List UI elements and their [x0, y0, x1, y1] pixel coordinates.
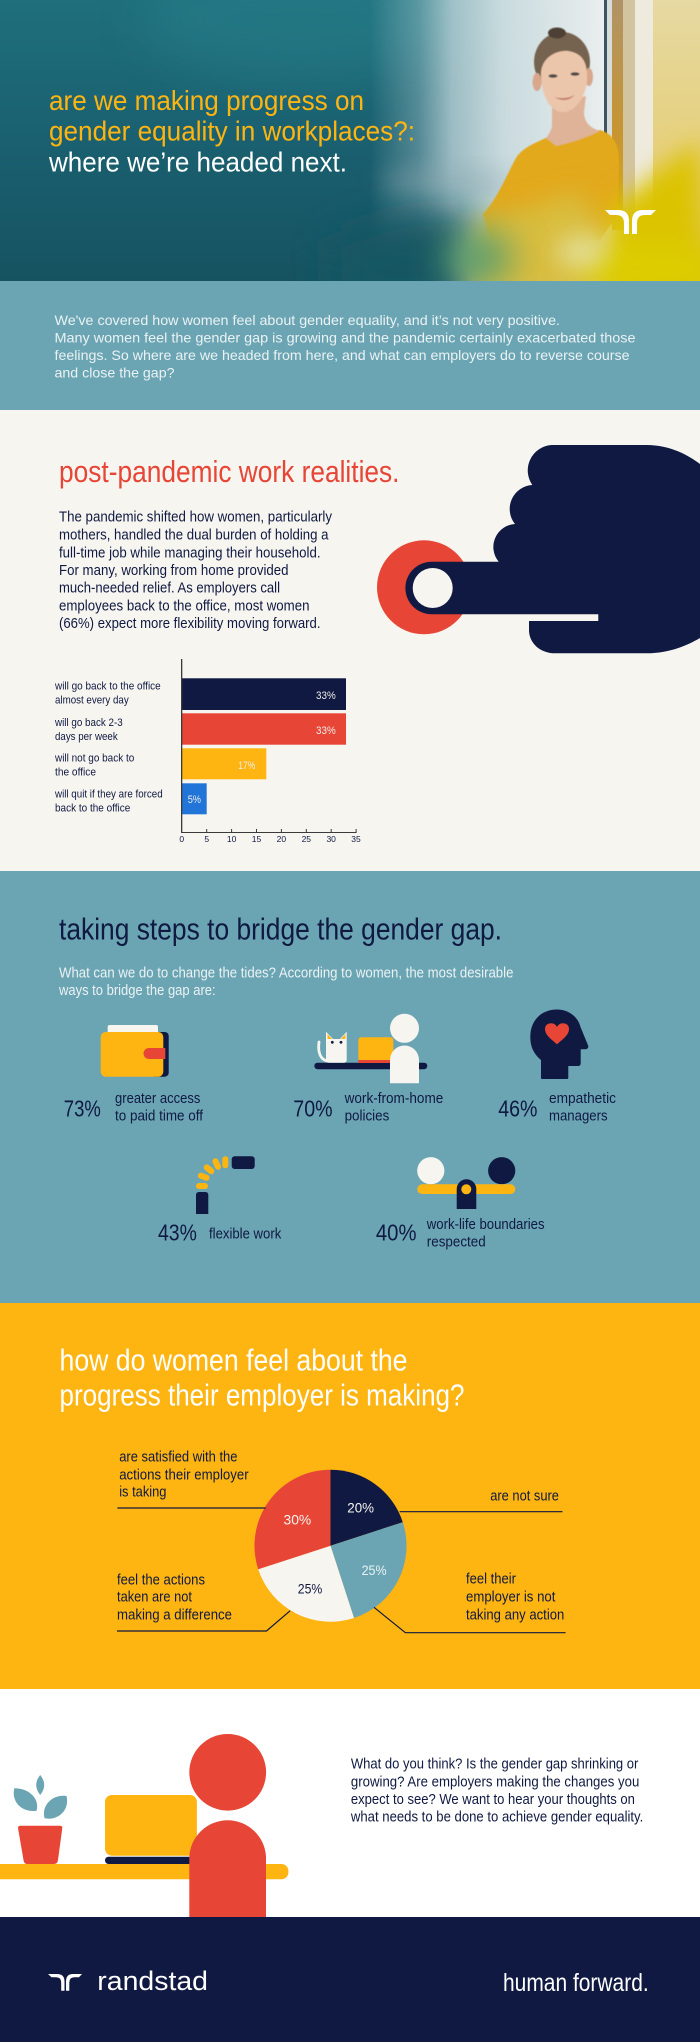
callout: satisfied: actions their employer [119, 1467, 249, 1483]
bar chart: 5% [188, 794, 201, 806]
icon: balance seesaw [417, 1157, 515, 1209]
callout: no difference: making a difference [117, 1607, 232, 1623]
bar chart: 33% [316, 725, 336, 737]
intro text: and close the gap? [54, 366, 175, 380]
panel: post-pandemic work realities [0, 410, 700, 871]
bar chart: will go back to the office [54, 680, 161, 692]
body text: much-needed relief. As employers call [59, 581, 280, 597]
pie chart: 30% [284, 1513, 311, 1528]
icon: wallet [101, 1025, 169, 1077]
stat: 43% flexible work [158, 1220, 282, 1246]
bar chart: 30 [326, 834, 336, 844]
intro text: We've covered how women feel about gender equality, and it’s not very positive. [54, 313, 560, 328]
callout: no difference: taken are not [117, 1590, 192, 1606]
bar chart: days per week [55, 731, 118, 743]
window frame [604, 0, 700, 281]
subheading: ways to bridge the gap are: [58, 983, 216, 999]
stat: 43% flexible work: 43% [158, 1220, 197, 1246]
stat: 40% work-life boundaries: work-life boundaries [426, 1217, 545, 1233]
hero title: gender equality in workplaces?: [49, 116, 415, 147]
body text: For many, working from home provided [59, 563, 288, 579]
body text: (66%) expect more flexibility moving forward. [59, 616, 320, 632]
closing text [350, 1756, 643, 1826]
heading: taking steps to bridge the gender gap. [59, 911, 502, 946]
stat: 40% work-life boundaries [376, 1217, 545, 1251]
callout: no action: employer is not [466, 1589, 555, 1605]
stat: 43% flexible work: flexible work [209, 1227, 282, 1243]
stat: 70% work-from-home: work-from-home [344, 1091, 443, 1107]
bar chart: 33% [316, 690, 336, 702]
stat: 70% work-from-home: 70% [293, 1096, 333, 1122]
bar chart: the office [55, 767, 96, 779]
stat: 40% work-life boundaries: respected [427, 1235, 486, 1251]
bar chart: will go back 2-3 [54, 717, 123, 729]
icon: cat, laptop and person [314, 1014, 427, 1083]
stat: 70% work-from-home: policies [345, 1109, 389, 1125]
subheading [58, 965, 513, 999]
heading: progress their employer is making? [60, 1378, 464, 1413]
pie chart: 25% [298, 1581, 322, 1596]
callout: no action: taking any action [466, 1607, 564, 1623]
closing text: what needs to be done to achieve gender equality. [350, 1810, 643, 1826]
intro text: feelings. So where are we headed from here, and what can employers do to reverse course [54, 348, 630, 363]
stat: 46% empathetic managers: managers [549, 1109, 608, 1125]
body text: employees back to the office, most women [59, 599, 310, 615]
body text: full-time job while managing their household. [59, 545, 320, 561]
hero banner [0, 0, 700, 281]
callout: satisfied: are satisfied with the [119, 1450, 238, 1466]
pie chart: 20% [347, 1500, 374, 1515]
subheading: What can we do to change the tides? According to women, the most desirable [59, 965, 513, 981]
heading: post-pandemic work realities. [59, 454, 400, 489]
callout: no action [374, 1572, 566, 1633]
body text: The pandemic shifted how women, particularly [59, 510, 333, 526]
randstad logo: randstad [97, 1966, 208, 1996]
stat: 40% work-life boundaries: 40% [376, 1220, 416, 1246]
bar chart: back to the office [55, 803, 130, 815]
icon: flexible bend [196, 1156, 255, 1214]
hero title: are we making progress on [49, 85, 364, 116]
body text [59, 510, 333, 632]
hero title [48, 85, 415, 178]
tagline: human forward. [503, 1969, 649, 1997]
blurred yellow foreground [444, 140, 700, 300]
callout: satisfied: is taking [119, 1485, 166, 1501]
heading [60, 1343, 464, 1413]
footer [0, 1917, 700, 2042]
photo: woman in yellow sweater [483, 28, 619, 240]
bar chart: 20 [277, 834, 286, 844]
stat: 73% paid time off: 73% [64, 1096, 101, 1122]
stat: 73% paid time off: to paid time off [115, 1109, 204, 1125]
bar chart: will quit if they are forced [54, 789, 163, 801]
icon: hand with red ring [377, 445, 700, 653]
stat: 46% empathetic managers: 46% [498, 1096, 538, 1122]
intro text [54, 313, 636, 380]
illustration: person at desk with plant [0, 1734, 288, 1917]
stat: 73% paid time off: greater access [115, 1091, 200, 1107]
panel: taking steps to bridge the gender gap [0, 871, 700, 1303]
callout: no difference: feel the actions [117, 1572, 205, 1588]
icon: head with heart [530, 1010, 588, 1079]
panel: how do women feel [0, 1303, 700, 1689]
callout: satisfied [117, 1450, 266, 1508]
panel: intro band [0, 281, 700, 410]
stat: 46% empathetic managers [498, 1091, 616, 1125]
closing text: growing? Are employers making the changes you [351, 1775, 639, 1791]
randstad logo [48, 1966, 208, 1996]
callout: no action: feel their [466, 1572, 516, 1588]
bar chart: 35 [351, 834, 361, 844]
stat: 70% work-from-home [293, 1091, 443, 1125]
closing text: What do you think? Is the gender gap shrinking or [351, 1756, 639, 1772]
callout: not sure: are not sure [490, 1488, 559, 1504]
stat: 73% paid time off [64, 1091, 204, 1125]
bar chart: 15 [252, 834, 261, 844]
bar chart [54, 659, 361, 844]
bar chart: 10 [227, 834, 237, 844]
logo mark [605, 210, 656, 234]
bar chart: 17% [238, 760, 255, 772]
heading: how do women feel about the [60, 1343, 408, 1378]
body text: mothers, handled the dual burden of holding a [59, 528, 329, 544]
bar chart: almost every day [55, 694, 129, 706]
hero title: where we’re headed next. [48, 147, 347, 178]
pie chart: 25% [362, 1563, 387, 1578]
closing text: expect to see? We want to hear your thoughts on [351, 1792, 635, 1808]
bar chart: 0 [179, 834, 184, 844]
bar chart: will not go back to [54, 753, 134, 765]
bar chart: 25 [302, 834, 311, 844]
stat: 46% empathetic managers: empathetic [549, 1091, 616, 1107]
panel: closing question [0, 1689, 700, 1917]
pie chart [254, 1470, 407, 1622]
intro text: Many women feel the gender gap is growing and the pandemic certainly exacerbated those [54, 330, 636, 346]
callout: no difference [117, 1572, 290, 1631]
bar chart: 5 [204, 834, 209, 844]
